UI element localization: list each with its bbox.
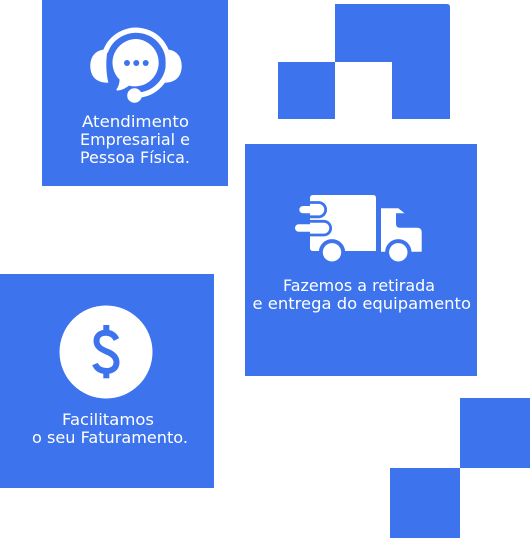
text: support caption: Empresarial e <box>80 130 190 149</box>
decorative blocks: bottom right <box>390 398 530 538</box>
decorative blocks: top <box>278 4 450 119</box>
text: billing caption: o seu Faturamento. <box>32 428 188 447</box>
icon: delivery truck <box>295 195 422 266</box>
text: support caption <box>80 112 190 167</box>
icon: headset with speech bubble <box>90 30 182 103</box>
panel: billing <box>0 274 214 488</box>
text: billing caption: Facilitamos <box>62 410 154 429</box>
panel: pickup and delivery <box>245 144 477 376</box>
icon: dollar coin <box>60 306 152 398</box>
panel: customer support <box>42 0 228 186</box>
text: billing caption <box>32 410 188 447</box>
text: delivery caption: Fazemos a retirada <box>283 276 435 295</box>
text: support caption: Pessoa Física. <box>80 148 190 167</box>
text: support caption: Atendimento <box>82 112 189 131</box>
text: delivery caption: e entrega do equipamento <box>252 294 471 313</box>
text: delivery caption <box>252 276 471 313</box>
